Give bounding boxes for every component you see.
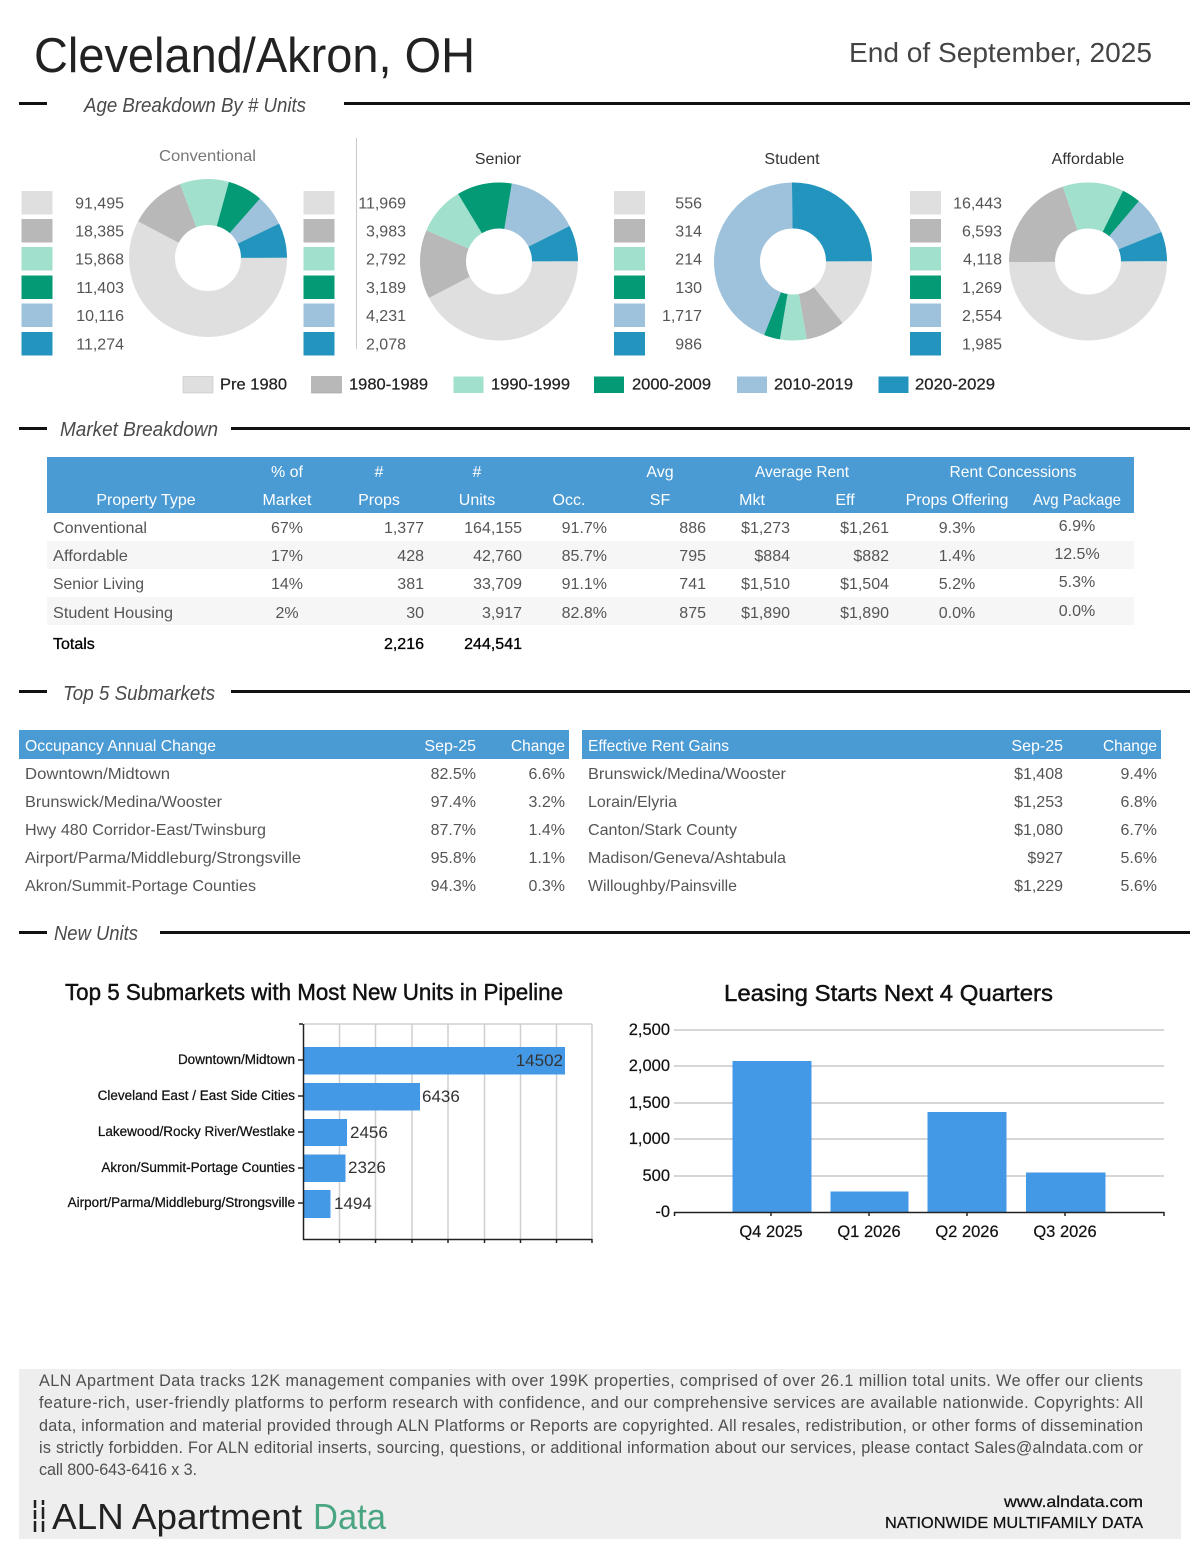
row: totals: 2,216 xyxy=(384,636,424,653)
row: senior living: 14% xyxy=(271,576,303,593)
values: senior: 2,078 xyxy=(366,336,406,354)
table: occupancy annual change: Change xyxy=(511,738,565,755)
values: conventional: 91,495 xyxy=(75,196,124,212)
table: effective rent gains xyxy=(582,730,1161,895)
table: occupancy annual change: 95.8% xyxy=(431,850,476,867)
table: effective rent gains: 6.7% xyxy=(1121,822,1157,839)
row: conventional: 886 xyxy=(679,520,706,537)
row: totals xyxy=(53,636,522,653)
table: effective rent gains: 5.6% xyxy=(1121,878,1157,895)
swatches: conventional xyxy=(22,191,52,356)
values: conventional xyxy=(75,196,124,354)
values: affordable: 16,443 xyxy=(953,196,1002,212)
footer text: call 800-643-6416 x 3. xyxy=(39,1461,197,1479)
y axis labels: -0 xyxy=(655,1203,670,1221)
table: occupancy annual change: 97.4% xyxy=(431,794,476,811)
row: totals: 244,541 xyxy=(464,636,522,653)
x axis labels: Q1 2026 xyxy=(837,1223,901,1241)
values: senior: 4,231 xyxy=(366,308,406,325)
table: occupancy annual change: Sep-25 xyxy=(424,738,476,755)
table: occupancy annual change: 0.3% xyxy=(529,878,565,895)
values: student: 130 xyxy=(675,280,702,297)
table header: Props xyxy=(358,492,400,509)
y axis labels: 500 xyxy=(642,1167,670,1185)
donut: senior xyxy=(443,206,555,318)
table: effective rent gains: Madison/Geneva/Ashtabula xyxy=(588,850,786,867)
values: affordable: 4,118 xyxy=(963,252,1002,268)
table: occupancy annual change: 94.3% xyxy=(431,878,476,895)
table: occupancy annual change: 6.6% xyxy=(529,766,565,783)
bar values: 14502 xyxy=(516,1051,563,1070)
table header: # xyxy=(473,464,482,481)
row: senior living: 5.2% xyxy=(939,576,975,593)
bar values: 2326 xyxy=(348,1158,386,1177)
row: affordable: 17% xyxy=(271,548,303,565)
table header: Average Rent xyxy=(755,464,850,481)
bar labels: Airport/Parma/Middleburg/Strongsville xyxy=(68,1195,295,1210)
panel: affordable xyxy=(910,151,1144,356)
chart title: conventional: Conventional xyxy=(159,148,256,165)
row: student housing: 875 xyxy=(679,605,706,622)
values: senior: 2,792 xyxy=(366,252,406,268)
age legend: 2010-2019 xyxy=(774,376,853,394)
row: senior living: $1,510 xyxy=(741,576,790,593)
age legend: 1990-1999 xyxy=(491,376,570,394)
row: affordable: 12.5% xyxy=(1054,546,1100,563)
table: effective rent gains: 6.8% xyxy=(1121,794,1157,811)
row: conventional: 164,155 xyxy=(464,520,522,537)
row: senior living xyxy=(53,574,1095,593)
table header: Occ. xyxy=(553,492,585,509)
table: effective rent gains: 5.6% xyxy=(1121,850,1157,867)
chart: top 5 submarkets pipeline xyxy=(65,979,592,1243)
row: conventional: $1,261 xyxy=(840,520,889,537)
x axis labels: Q3 2026 xyxy=(1033,1223,1097,1241)
tagline: NATIONWIDE MULTIFAMILY DATA xyxy=(885,1515,1143,1532)
donut: affordable xyxy=(1032,206,1144,318)
row: affordable: 42,760 xyxy=(473,548,522,565)
row: senior living: $1,504 xyxy=(840,576,889,593)
chart: leasing starts xyxy=(629,980,1164,1241)
row: student housing: $1,890 xyxy=(741,605,790,622)
swatches: senior xyxy=(304,191,334,356)
table: occupancy annual change: Akron/Summit-Portage Counties xyxy=(25,878,256,895)
values: conventional: 10,116 xyxy=(76,308,124,325)
website: www.alndata.com xyxy=(1003,1494,1143,1511)
table header: Eff xyxy=(835,492,855,509)
values: affordable xyxy=(953,196,1002,354)
table header: % of xyxy=(271,464,304,481)
row: conventional: 9.3% xyxy=(939,520,975,537)
values: student: 314 xyxy=(675,224,702,240)
table: effective rent gains: $927 xyxy=(1027,850,1063,867)
row: totals: Totals xyxy=(53,636,95,653)
table: occupancy annual change: 1.1% xyxy=(529,850,565,867)
bar values: 2456 xyxy=(350,1123,388,1142)
bar labels: Downtown/Midtown xyxy=(178,1052,295,1067)
values: senior: 11,969 xyxy=(358,196,406,212)
row: conventional: 6.9% xyxy=(1059,518,1095,535)
row: conventional: 67% xyxy=(271,520,303,537)
table: occupancy annual change: Hwy 480 Corridor-East/Twinsburg xyxy=(25,822,266,839)
row: student housing: 2% xyxy=(275,605,299,622)
age legend: Pre 1980 xyxy=(220,376,287,394)
donut: conventional xyxy=(152,202,264,314)
age legend: 2020-2029 xyxy=(915,376,995,394)
values: conventional: 11,403 xyxy=(76,280,124,297)
row: senior living: 91.1% xyxy=(562,576,607,593)
values: student: 214 xyxy=(675,252,702,268)
row: conventional: 1,377 xyxy=(384,520,424,537)
values: affordable: 2,554 xyxy=(962,308,1002,325)
table: effective rent gains: Brunswick/Medina/Wooster xyxy=(588,766,787,783)
values: conventional: 18,385 xyxy=(75,224,124,240)
bars xyxy=(732,1061,1106,1212)
bar values: 6436 xyxy=(422,1087,460,1106)
table header: # xyxy=(375,464,384,481)
heading: market breakdown: Market Breakdown xyxy=(60,419,218,441)
table: occupancy annual change: Brunswick/Medina/Wooster xyxy=(25,794,223,811)
bar values: 1494 xyxy=(334,1194,372,1213)
bar labels: Lakewood/Rocky River/Westlake xyxy=(98,1124,295,1139)
row: student housing: 0.0% xyxy=(939,605,975,622)
row: student housing: 0.0% xyxy=(1059,603,1095,620)
row: affordable: $884 xyxy=(754,548,790,565)
heading: age breakdown: Age Breakdown By # Units xyxy=(83,95,306,117)
y axis labels: 2,500 xyxy=(629,1021,670,1039)
values: senior: 3,983 xyxy=(366,224,406,240)
swatches: student xyxy=(614,191,645,356)
row: affordable: $882 xyxy=(853,548,889,565)
table header: Units xyxy=(459,492,495,509)
row: conventional: 91.7% xyxy=(562,520,607,537)
footer text: is strictly forbidden. For ALN editorial inserts, sourcing, questions, or additional information about our services, please contact Sales@alndata.com or xyxy=(39,1439,1144,1457)
values: conventional: 11,274 xyxy=(76,336,124,354)
table: effective rent gains: Effective Rent Gains xyxy=(588,738,729,755)
footer panel xyxy=(19,1369,1181,1539)
row: student housing xyxy=(53,603,1095,622)
chart title: leasing starts: Leasing Starts Next 4 Quarters xyxy=(724,980,1053,1006)
row: senior living: 33,709 xyxy=(473,576,522,593)
title: Cleveland/Akron, OH xyxy=(34,29,475,83)
heading: top 5 submarkets: Top 5 Submarkets xyxy=(63,683,215,705)
row: student housing: Student Housing xyxy=(53,605,173,622)
date: End of September, 2025 xyxy=(849,37,1152,68)
market breakdown table xyxy=(47,457,1134,653)
chart title: student: Student xyxy=(764,151,820,168)
table header: Props Offering xyxy=(906,492,1008,509)
table header: Mkt xyxy=(739,492,765,509)
row: senior living: Senior Living xyxy=(53,576,144,593)
age legend xyxy=(183,376,995,394)
donut: student xyxy=(737,206,849,318)
logo: Data xyxy=(313,1496,387,1537)
table: effective rent gains: Lorain/Elyria xyxy=(588,794,677,811)
bar values xyxy=(334,1051,563,1213)
x axis labels: Q4 2025 xyxy=(739,1223,803,1241)
footer text xyxy=(39,1372,1144,1479)
bars xyxy=(304,1047,565,1218)
bar labels: Akron/Summit-Portage Counties xyxy=(101,1160,295,1175)
values: student: 986 xyxy=(675,336,702,354)
table header: SF xyxy=(650,492,670,509)
chart title: affordable: Affordable xyxy=(1052,151,1124,168)
table: occupancy annual change: 82.5% xyxy=(431,766,476,783)
logo xyxy=(35,1496,387,1537)
table: occupancy annual change: 87.7% xyxy=(431,822,476,839)
swatches: affordable xyxy=(910,191,941,356)
panel: conventional xyxy=(22,148,264,356)
table header xyxy=(47,457,1134,513)
values: student: 1,717 xyxy=(662,308,702,325)
table header: Rent Concessions xyxy=(950,464,1076,481)
row: senior living: 5.3% xyxy=(1059,574,1095,591)
table: effective rent gains: Sep-25 xyxy=(1011,738,1063,755)
table: effective rent gains: Canton/Stark County xyxy=(588,822,737,839)
row: student housing: 30 xyxy=(406,605,424,622)
footer text: feature-rich, user-friendly platforms to perform research with confidence, and our comprehensive services are available nationwide. Copyrights: All xyxy=(39,1394,1143,1412)
age legend: 2000-2009 xyxy=(632,376,711,394)
footer text: data, information and material provided through ALN Platforms or Reports are copyrighted. All resales, redistribution, or other forms of dissemination xyxy=(39,1417,1143,1435)
values: student: 556 xyxy=(675,196,702,212)
values: student xyxy=(662,196,702,354)
values: affordable: 1,985 xyxy=(962,336,1002,354)
table header: Avg xyxy=(646,464,674,481)
values: conventional: 15,868 xyxy=(75,252,124,268)
row: affordable: 428 xyxy=(397,548,424,565)
table: effective rent gains: $1,080 xyxy=(1014,822,1063,839)
y axis labels: 1,500 xyxy=(629,1094,670,1112)
y axis labels: 2,000 xyxy=(629,1057,670,1075)
x axis labels xyxy=(739,1223,1097,1241)
table: effective rent gains: $1,253 xyxy=(1014,794,1063,811)
footer text: ALN Apartment Data tracks 12K management companies with over 199K properties, comprised of over 26.1 million total units. We offer our clients xyxy=(39,1372,1143,1390)
row: senior living: 381 xyxy=(397,576,424,593)
table: occupancy annual change: Downtown/Midtown xyxy=(25,766,170,783)
values: affordable: 6,593 xyxy=(962,224,1002,240)
values: senior: 3,189 xyxy=(366,280,406,297)
row: affordable: Affordable xyxy=(53,548,128,565)
table: effective rent gains: Willoughby/Painsville xyxy=(588,878,737,895)
heading: new units: New Units xyxy=(54,923,138,945)
table: effective rent gains: $1,229 xyxy=(1014,878,1063,895)
values: affordable: 1,269 xyxy=(962,280,1002,297)
row: affordable xyxy=(53,546,1100,565)
values: senior xyxy=(358,196,406,354)
row: conventional: $1,273 xyxy=(741,520,790,537)
logo: ALN Apartment xyxy=(52,1496,302,1537)
table header: Property Type xyxy=(96,492,196,509)
row: student housing: $1,890 xyxy=(840,605,889,622)
table: effective rent gains: Change xyxy=(1103,738,1157,755)
row: affordable: 795 xyxy=(679,548,706,565)
table: occupancy annual change: 1.4% xyxy=(529,822,565,839)
age legend: 1980-1989 xyxy=(349,376,428,394)
panel: senior xyxy=(304,151,555,356)
table: occupancy annual change: Airport/Parma/Middleburg/Strongsville xyxy=(25,850,301,867)
chart title: senior: Senior xyxy=(475,151,522,168)
row: affordable: 85.7% xyxy=(562,548,607,565)
x axis labels: Q2 2026 xyxy=(935,1223,999,1241)
y axis labels: 1,000 xyxy=(629,1130,670,1148)
row: student housing: 82.8% xyxy=(562,605,607,622)
table: occupancy annual change: 3.2% xyxy=(529,794,565,811)
table: effective rent gains: $1,408 xyxy=(1014,766,1063,783)
y axis labels xyxy=(629,1021,670,1221)
row: conventional xyxy=(53,518,1095,537)
row: conventional: Conventional xyxy=(53,520,147,537)
table header: Market xyxy=(263,492,312,509)
row: affordable: 1.4% xyxy=(939,548,975,565)
bar labels xyxy=(68,1052,295,1210)
table header: Avg Package xyxy=(1033,492,1121,509)
table: occupancy annual change xyxy=(19,730,569,895)
bar labels: Cleveland East / East Side Cities xyxy=(98,1088,295,1103)
panel: student xyxy=(614,151,849,356)
chart title: pipeline: Top 5 Submarkets with Most New Units in Pipeline xyxy=(65,979,563,1005)
table: effective rent gains: 9.4% xyxy=(1121,766,1157,783)
table: occupancy annual change: Occupancy Annual Change xyxy=(25,738,216,755)
row: senior living: 741 xyxy=(679,576,706,593)
row: student housing: 3,917 xyxy=(482,605,522,622)
